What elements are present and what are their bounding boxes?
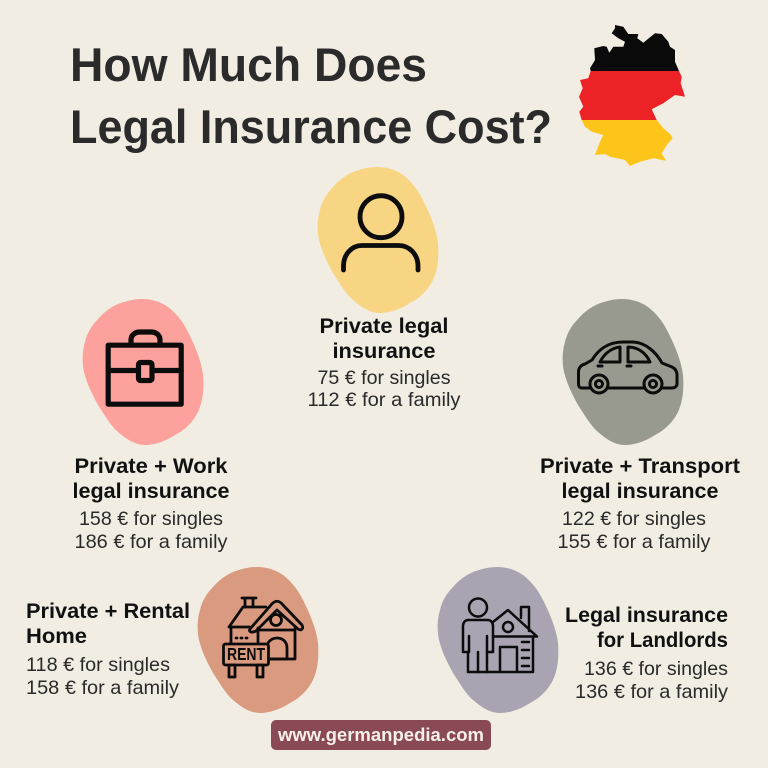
website badge (271, 720, 491, 750)
prices: 136 € for singles (584, 658, 728, 680)
icon: car (578, 342, 677, 393)
panel: private + transport (540, 299, 740, 553)
heading line 2: legal insurance (72, 479, 230, 503)
icon: person (344, 196, 418, 270)
heading line 2: for Landlords (597, 628, 728, 652)
blob: grey (563, 299, 683, 445)
heading: Private legal (320, 314, 448, 338)
prices: 75 € for singles (318, 367, 451, 389)
icon: Germany flag map (579, 25, 685, 166)
blob: terracotta (198, 567, 318, 713)
prices: 122 € for singles (562, 508, 706, 530)
prices family: 112 € for a family (308, 389, 461, 411)
panel: private + rental home (26, 567, 318, 713)
icon: rent house (224, 598, 303, 677)
panel: private legal insurance (308, 167, 461, 411)
title: Legal Insurance Cost? (70, 100, 552, 153)
blob: lavender grey (438, 567, 558, 713)
blob: pink (83, 299, 203, 445)
heading line 2: insurance (332, 339, 436, 363)
website badge: www.germanpedia.com (277, 725, 484, 745)
prices family: 136 € for a family (575, 681, 728, 703)
icon: landlord and house (463, 598, 537, 672)
blob: yellow (318, 167, 438, 313)
title: How Much Does (70, 38, 427, 91)
heading line 2: legal insurance (562, 479, 719, 503)
prices family: 155 € for a family (558, 531, 711, 553)
panel: private + work (72, 299, 230, 553)
title (70, 38, 552, 153)
prices: 118 € for singles (26, 654, 170, 676)
sign text: RENT (227, 644, 265, 664)
prices family: 158 € for a family (26, 677, 179, 699)
prices family: 186 € for a family (74, 531, 228, 553)
heading: Legal insurance (565, 603, 728, 627)
prices: 158 € for singles (79, 508, 223, 530)
heading line 2: Home (26, 624, 87, 648)
icon: briefcase (108, 332, 181, 404)
heading: Private + Work (74, 454, 228, 478)
panel: landlords (438, 567, 728, 713)
heading: Private + Rental (26, 599, 190, 623)
heading: Private + Transport (540, 454, 740, 478)
